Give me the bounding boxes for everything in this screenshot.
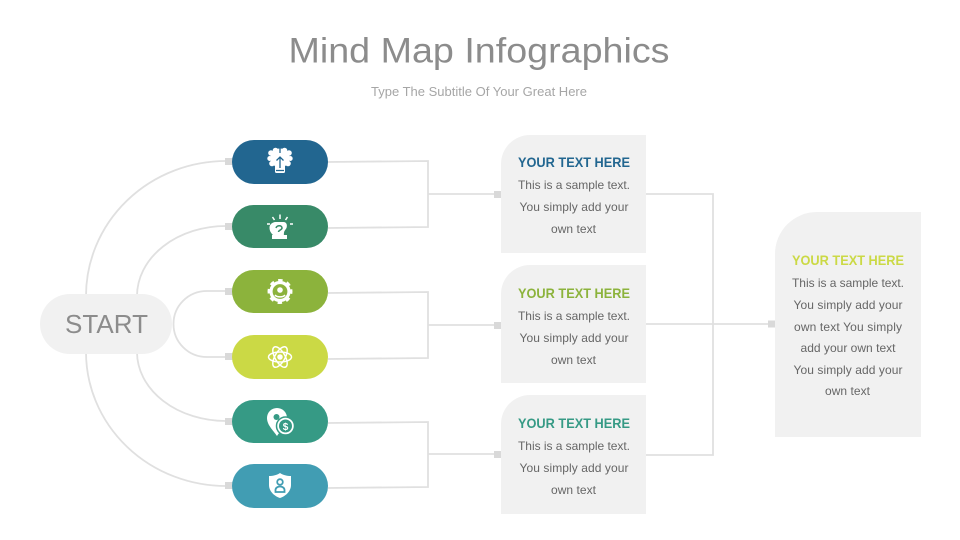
connectors: start to pills [86,161,228,486]
card: result: add your own text [800,341,896,355]
card: result: own text [825,384,871,398]
card: top: You simply add your [520,200,628,214]
icon: location pin with dollar: $ [283,422,289,433]
card: middle: YOUR TEXT HERE [518,285,630,301]
icon: brain light bulb [267,148,293,173]
card: top: own text [551,222,597,236]
start node: START [65,309,148,339]
card: result: You simply add your [794,298,902,312]
pill: brain bulb [232,140,328,184]
card: result [775,212,921,437]
card: result: You simply add your [794,363,902,377]
card: middle [501,265,646,383]
icon: idea fist [267,214,293,239]
title: Mind Map Infographics [288,32,670,70]
card: bottom: This is a sample text. [518,439,630,453]
pill: atom [232,335,328,379]
card: result: This is a sample text. [792,276,904,290]
card: bottom [501,395,646,514]
start node [40,294,172,354]
pill: shield [232,464,328,508]
connector squares: cards [494,191,776,458]
card: result: YOUR TEXT HERE [792,252,904,268]
card: top [501,135,646,253]
icon: gear with person [267,279,293,304]
pill: raised fist [232,205,328,248]
pill: location money [232,400,328,443]
connectors: pills to cards [328,161,770,488]
icon: atom [268,345,292,369]
card: middle: You simply add your [520,331,628,345]
card: bottom: own text [551,483,597,497]
connector squares: pills [225,158,233,489]
card: top: This is a sample text. [518,178,630,192]
card: middle: own text [551,353,597,367]
card: bottom: YOUR TEXT HERE [518,415,630,431]
subtitle: Type The Subtitle Of Your Great Here [371,84,587,99]
card: bottom: You simply add your [520,461,628,475]
icon: shield with user [269,473,291,498]
card: result: own text You simply [794,320,902,334]
card: middle: This is a sample text. [518,309,630,323]
card: top: YOUR TEXT HERE [518,154,630,170]
pill: gear [232,270,328,313]
